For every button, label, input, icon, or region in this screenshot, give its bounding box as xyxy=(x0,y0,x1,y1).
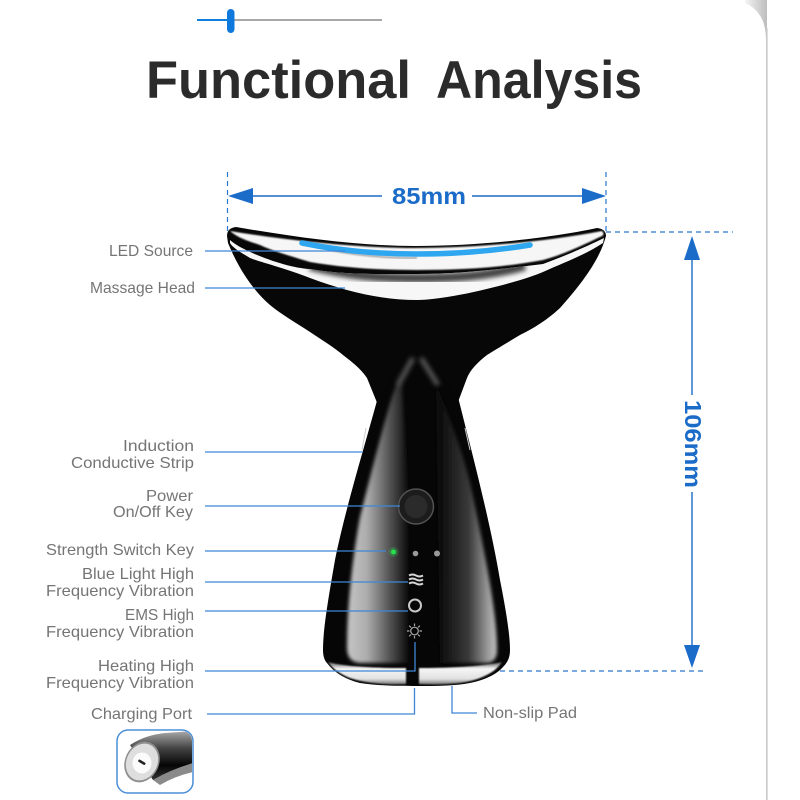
callout: EMS High Frequency Vibration: Frequency Vibration xyxy=(46,624,194,641)
black head silhouette xyxy=(227,227,606,410)
cylinder body xyxy=(130,731,193,780)
callout: Massage Head: Massage Head xyxy=(90,280,195,297)
callout: Heating High Frequency Vibration xyxy=(46,642,415,692)
title: Analysis xyxy=(436,51,642,110)
charging port thumbnail xyxy=(117,730,193,793)
slider decoration xyxy=(197,9,382,33)
upper band grey sheen xyxy=(330,250,417,258)
inner disc xyxy=(132,752,152,774)
callout: Induction Conductive Strip: Induction xyxy=(123,438,194,455)
silver ring on end xyxy=(124,742,160,782)
right body highlight xyxy=(436,383,497,663)
callout: Power On/Off Key xyxy=(113,488,400,521)
callout: Blue Light High Frequency Vibration: Frequency Vibration xyxy=(46,583,194,600)
side edge glints xyxy=(362,428,470,450)
page background corner xyxy=(735,0,768,800)
height dimension: 106mm xyxy=(500,232,733,671)
icon: ring xyxy=(409,600,421,612)
callout: Blue Light High Frequency Vibration xyxy=(46,566,408,600)
title xyxy=(146,51,642,110)
silver base left xyxy=(328,662,406,684)
callout: Power On/Off Key: Power xyxy=(146,488,194,505)
strength indicator dots xyxy=(388,547,440,557)
USB slot xyxy=(138,760,146,765)
device illustration xyxy=(225,227,610,686)
LED strip xyxy=(302,243,530,254)
silver massage head upper band xyxy=(230,231,604,270)
title: Functional xyxy=(146,51,411,110)
callout: LED Source: LED Source xyxy=(109,243,193,260)
callout: Heating High Frequency Vibration: Heating High xyxy=(98,658,194,675)
lower silver trim xyxy=(153,762,193,785)
silver base right xyxy=(419,662,502,684)
callout: Charging Port: Charging Port xyxy=(91,706,193,723)
icon: waves xyxy=(409,574,423,584)
callout: EMS High Frequency Vibration: EMS High xyxy=(125,607,194,624)
width dimension: 85mm: 85mm xyxy=(392,183,466,209)
left body highlight xyxy=(347,383,408,663)
silver massage head lower band xyxy=(230,238,604,300)
handle body xyxy=(323,353,510,686)
callout: Blue Light High Frequency Vibration: Blue Light High xyxy=(82,566,194,583)
power key xyxy=(398,489,434,524)
callout: Induction Conductive Strip xyxy=(71,438,363,472)
callout: Strength Switch Key: Strength Switch Key xyxy=(46,542,194,559)
neck reflections xyxy=(398,358,438,385)
callout: EMS High Frequency Vibration xyxy=(46,607,408,641)
callout: Power On/Off Key: On/Off Key xyxy=(113,504,193,521)
port face xyxy=(126,744,158,780)
callout: Heating High Frequency Vibration: Frequency Vibration xyxy=(46,675,194,692)
callout: Induction Conductive Strip: Conductive Strip xyxy=(71,455,194,472)
callout: Charging Port xyxy=(91,688,414,723)
callout: Non-slip Pad: Non-slip Pad xyxy=(483,705,577,722)
icon: sun xyxy=(407,624,422,638)
callout: Non-slip Pad xyxy=(452,686,577,722)
height dimension: 106mm: 106mm xyxy=(680,400,706,488)
width dimension: 85mm xyxy=(228,172,606,232)
